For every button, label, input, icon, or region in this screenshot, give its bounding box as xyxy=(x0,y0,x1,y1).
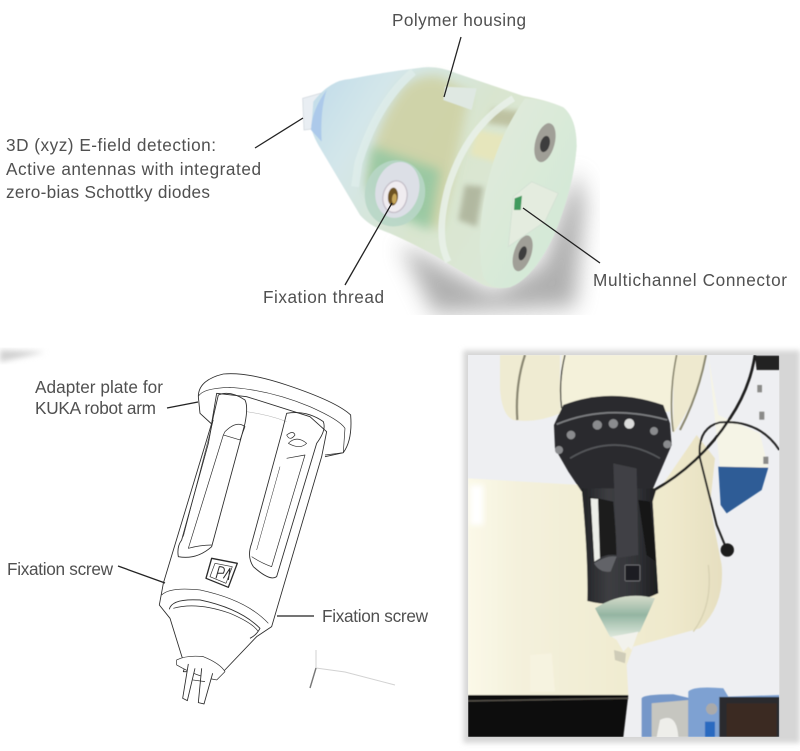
probe tip in holder xyxy=(595,596,655,638)
flange xyxy=(198,374,351,457)
wall background xyxy=(468,355,779,737)
fixation thread boss xyxy=(357,153,433,233)
label: Fixation screw left: Fixation screw xyxy=(7,559,114,579)
mount ring xyxy=(554,396,672,492)
label: Adapter plate: Adapter plate for xyxy=(35,377,163,397)
probe shell xyxy=(311,67,577,288)
main body xyxy=(159,393,327,672)
icon: upper screw xyxy=(530,121,559,164)
collar xyxy=(162,589,268,623)
label: Adapter plate: KUKA robot arm xyxy=(35,398,156,418)
label: 3D E-field detection xyxy=(6,118,303,202)
blue bracket xyxy=(718,467,768,513)
label: Multichannel Connector: Multichannel Connector xyxy=(593,270,787,290)
faint coordinate axes xyxy=(310,650,395,688)
line drawing: adapter xyxy=(159,374,351,704)
base black cylinder xyxy=(468,695,628,737)
label: 3D E-field detection: 3D (xyz) E-field detection: xyxy=(6,135,216,155)
label: Polymer housing: Polymer housing xyxy=(392,10,526,30)
photo shadow frame xyxy=(463,350,800,743)
end face xyxy=(480,98,577,288)
label: Polymer housing xyxy=(392,10,526,97)
label: 3D E-field detection: zero-bias Schottky diodes xyxy=(6,182,210,202)
label: Adapter plate xyxy=(35,377,198,418)
right window xyxy=(250,413,324,578)
mount notch below tip xyxy=(614,650,626,663)
cables xyxy=(652,355,755,492)
label: Fixation thread xyxy=(263,203,392,307)
fork prongs xyxy=(183,664,213,704)
PM logo xyxy=(625,565,640,581)
adapter windows xyxy=(589,497,617,562)
ring bolts xyxy=(555,419,671,454)
label: 3D E-field detection: Active antennas with integrated xyxy=(6,159,261,179)
connector cut-out xyxy=(508,182,558,247)
instrument xyxy=(642,694,690,737)
decorative smudge xyxy=(0,350,45,362)
label: Fixation thread: Fixation thread xyxy=(263,287,384,307)
robot upper arm xyxy=(500,355,560,421)
adapter body xyxy=(582,488,658,604)
rim highlights xyxy=(442,98,513,262)
cone tip xyxy=(177,656,225,680)
icon: PM logo badge xyxy=(206,558,237,587)
blue tip ring xyxy=(311,90,327,142)
wall bolts xyxy=(757,385,762,392)
drop shadow xyxy=(400,170,585,313)
photo: robot arm with adapter xyxy=(463,350,800,743)
label: Fixation screw left xyxy=(7,559,165,583)
right white housing xyxy=(708,355,768,468)
robot main body xyxy=(468,435,722,695)
electronics band shading xyxy=(470,130,513,163)
photo: polymer probe xyxy=(303,67,585,313)
icon: lower screw xyxy=(509,233,537,274)
label: Fixation screw right: Fixation screw xyxy=(322,606,429,626)
inner circuit board xyxy=(367,76,470,230)
probe tip xyxy=(303,93,325,130)
left window xyxy=(178,393,247,557)
label: Multichannel Connector xyxy=(523,208,787,290)
